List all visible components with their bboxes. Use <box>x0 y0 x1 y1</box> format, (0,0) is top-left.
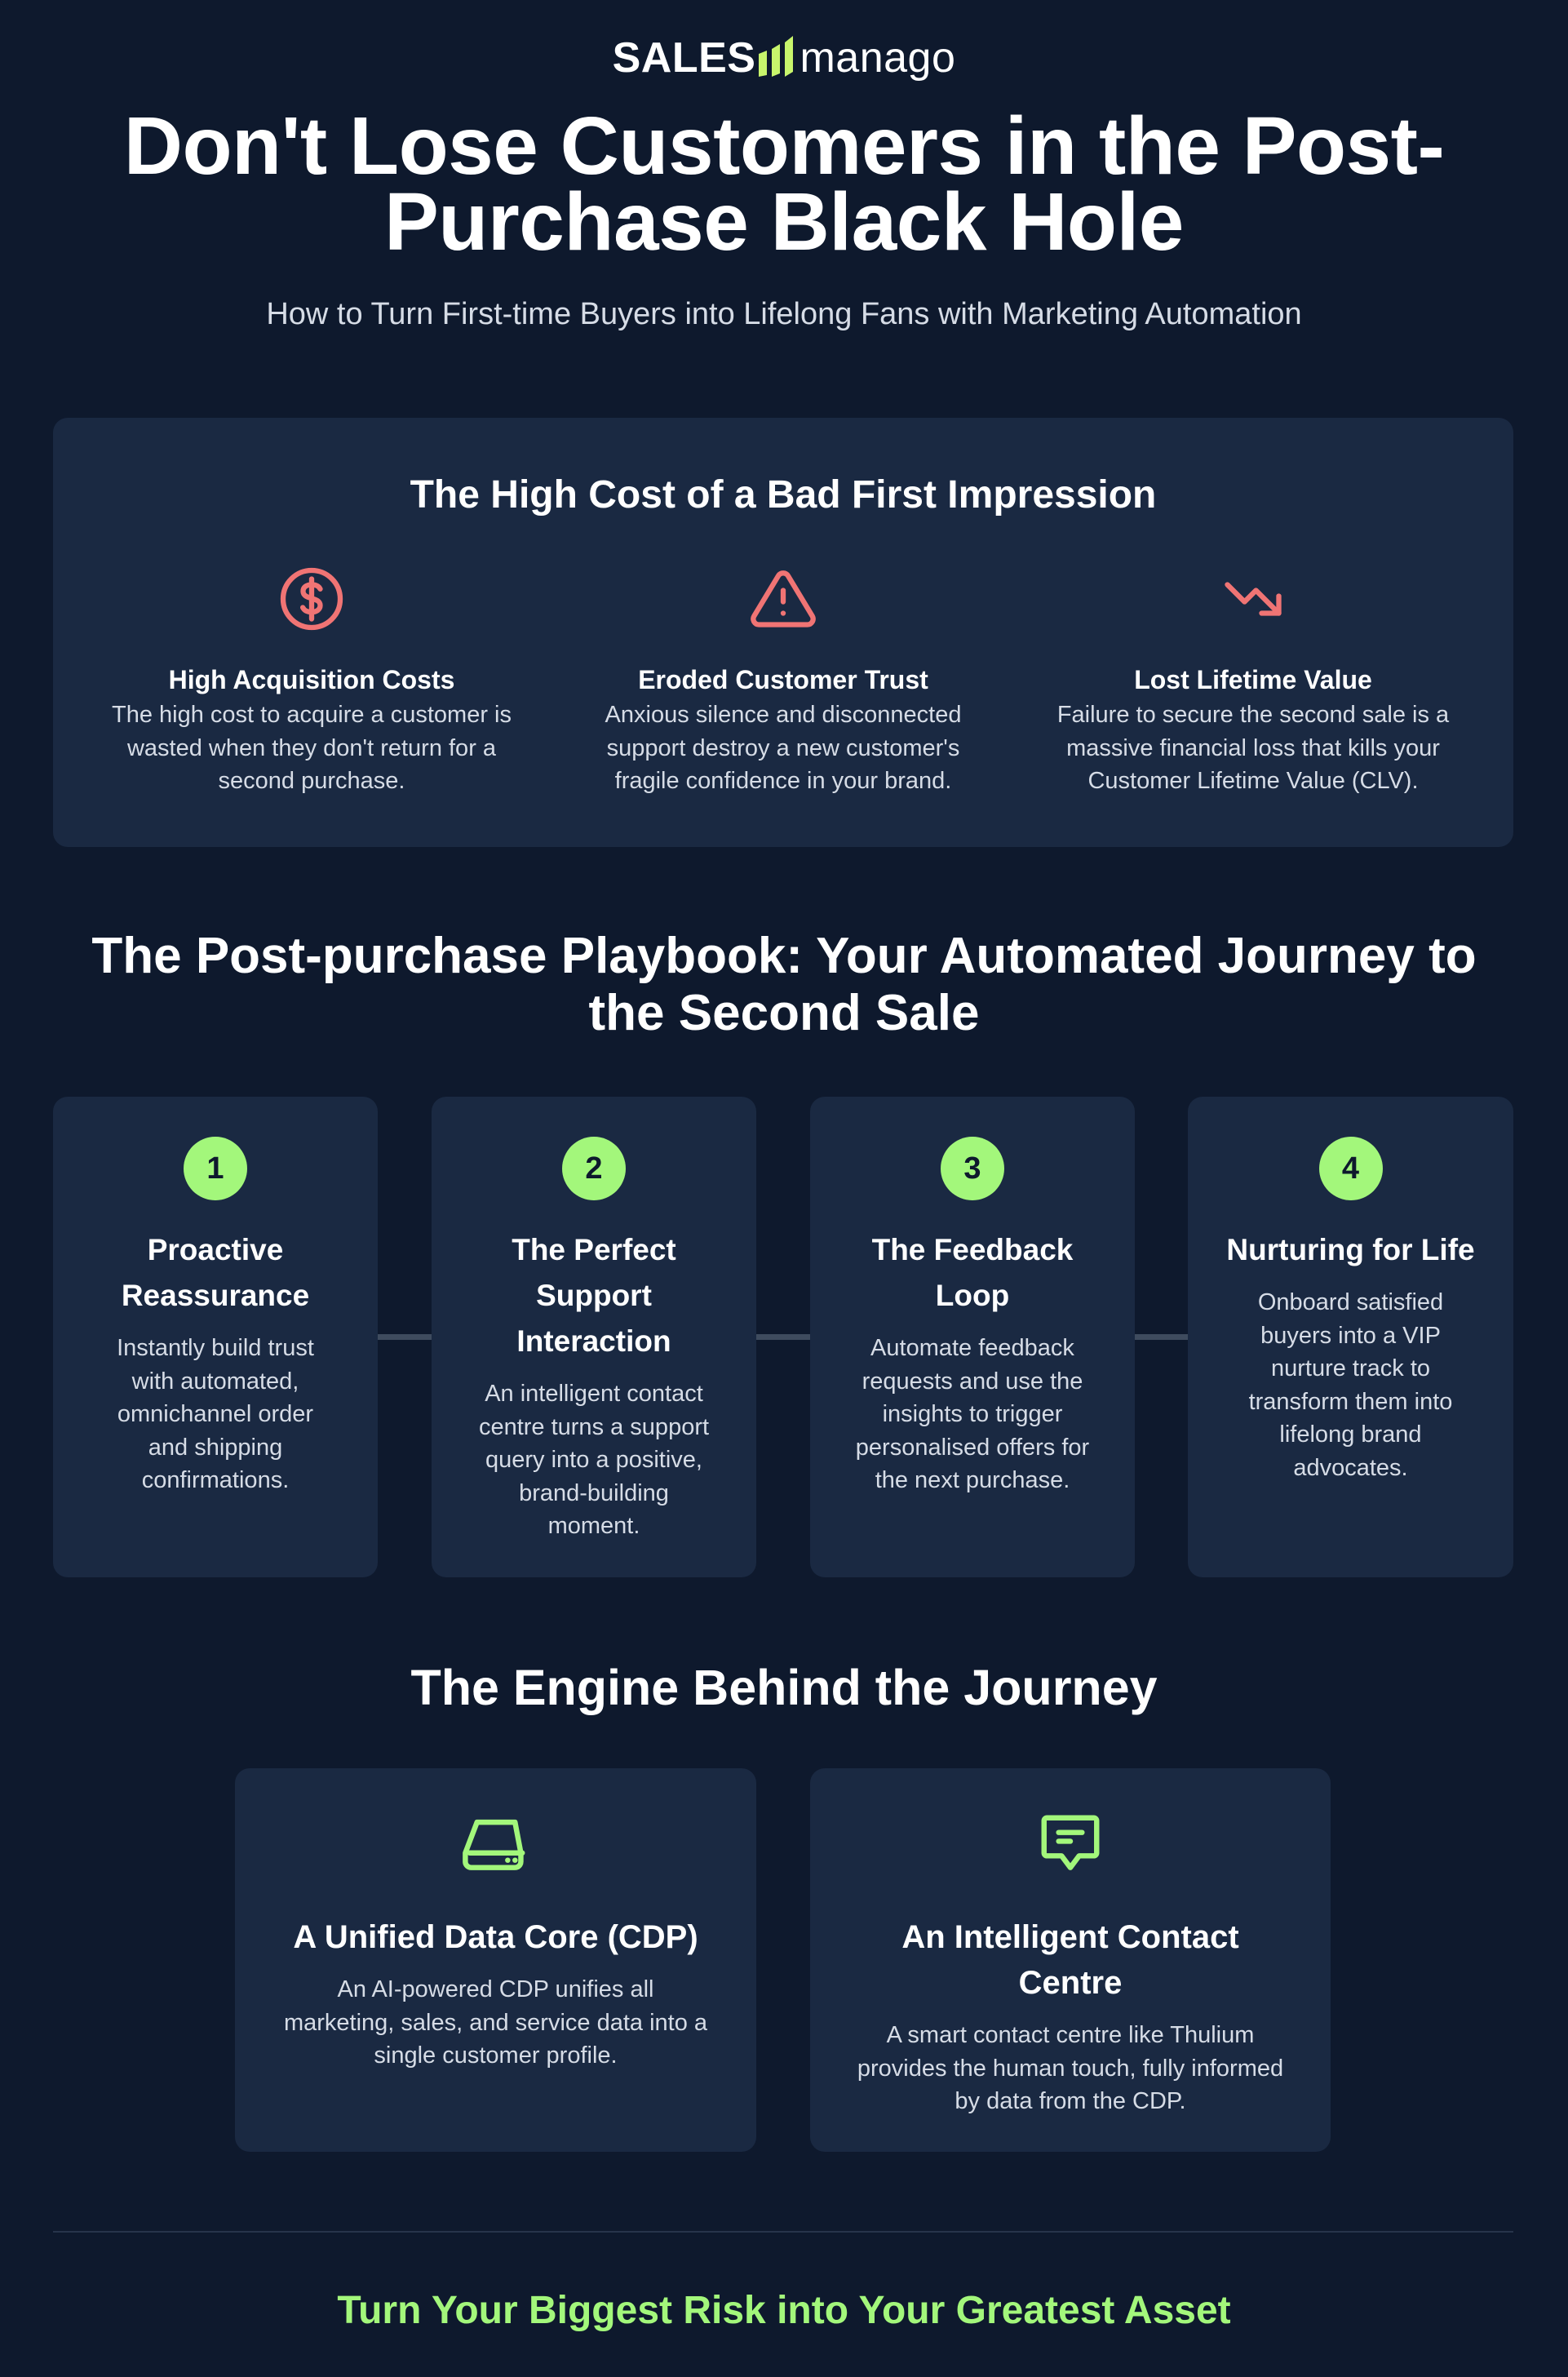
badge 4: 4 <box>1342 1151 1359 1186</box>
step 3: insights to trigger <box>883 1401 1062 1427</box>
item: lifetime value: massive financial loss that kills your <box>1066 734 1440 761</box>
panel: high cost <box>53 418 1513 847</box>
icon: drive <box>463 1820 525 1870</box>
title: Don't Lose Customers in the Post- <box>124 100 1444 192</box>
engine card: contact centre: An Intelligent Contact <box>901 1919 1239 1955</box>
section heading: engine: The Engine Behind the Journey <box>410 1660 1158 1715</box>
icon: trend down <box>1225 582 1282 616</box>
step 1: with automated, <box>132 1368 299 1394</box>
engine card: CDP: single customer profile. <box>374 2042 618 2069</box>
step 2: centre turns a support <box>479 1413 709 1439</box>
step 1: confirmations. <box>142 1467 289 1493</box>
badge 1 <box>184 1137 247 1200</box>
item: acquisition: The high cost to acquire a customer is <box>112 702 512 728</box>
step 2: Support <box>536 1279 652 1312</box>
item: trust: Anxious silence and disconnected <box>605 702 961 728</box>
step 4: nurture track to <box>1271 1355 1430 1381</box>
step 2: query into a positive, <box>485 1447 702 1473</box>
step 1: Reassurance <box>122 1279 309 1312</box>
item: acquisition <box>112 568 512 794</box>
engine card: contact centre: provides the human touch, fully informed <box>857 2055 1283 2081</box>
step 4: Nurturing for Life <box>1226 1233 1475 1266</box>
step 2: The Perfect <box>512 1233 676 1266</box>
engine card: CDP: marketing, sales, and service data into a <box>284 2009 707 2035</box>
item: lifetime value: Customer Lifetime Value (CLV). <box>1087 768 1419 794</box>
engine card: CDP <box>235 1768 756 2152</box>
step 4: buyers into a VIP <box>1260 1322 1441 1348</box>
panel heading: The High Cost of a Bad First Impression <box>410 473 1156 517</box>
step 3: Loop <box>936 1279 1009 1312</box>
title: Purchase Black Hole <box>384 176 1184 268</box>
item: acquisition: High Acquisition Costs <box>169 665 454 694</box>
icon: chat <box>1041 1815 1100 1870</box>
step 4: advocates. <box>1293 1454 1408 1480</box>
item: acquisition: wasted when they don't return for a <box>127 734 496 761</box>
badge 4 <box>1318 1137 1382 1200</box>
step 2: An intelligent contact <box>485 1381 703 1407</box>
badge 3: 3 <box>963 1151 981 1186</box>
step 1: Instantly build trust <box>117 1335 314 1361</box>
item: trust: Eroded Customer Trust <box>638 665 928 694</box>
section heading: playbook <box>91 928 1477 1041</box>
engine card: contact centre <box>810 1768 1331 2152</box>
step 3 <box>810 1097 1135 1577</box>
connectors <box>378 1334 1188 1340</box>
badge 3 <box>941 1137 1004 1200</box>
step 3: personalised offers for <box>856 1435 1089 1461</box>
engine card: contact centre: by data from the CDP. <box>955 2088 1186 2114</box>
engine card: contact centre: A smart contact centre like Thulium <box>887 2022 1254 2048</box>
step 1 <box>53 1097 378 1577</box>
item: lifetime value: Failure to secure the second sale is a <box>1057 702 1449 728</box>
section heading: playbook: the Second Sale <box>589 985 979 1041</box>
step 4 <box>1188 1097 1513 1577</box>
step 2: moment. <box>548 1513 640 1539</box>
title <box>124 100 1444 268</box>
badge 2: 2 <box>585 1151 603 1186</box>
item: trust <box>605 570 961 794</box>
item: trust: fragile confidence in your brand. <box>615 768 951 794</box>
logo: SALES manago <box>613 34 955 82</box>
engine card: contact centre: Centre <box>1019 1965 1122 2001</box>
badge 2 <box>562 1137 626 1200</box>
step 2 <box>432 1097 756 1577</box>
engine card: CDP: An AI-powered CDP unifies all <box>338 1976 653 2002</box>
section heading: playbook: The Post-purchase Playbook: Your Automated Journey to <box>91 928 1477 984</box>
step 3: the next purchase. <box>875 1467 1070 1493</box>
item: trust: support destroy a new customer's <box>607 734 959 761</box>
badge 1: 1 <box>206 1151 224 1186</box>
engine card: CDP: A Unified Data Core (CDP) <box>293 1919 698 1955</box>
step 2: Interaction <box>516 1324 671 1358</box>
item: acquisition: second purchase. <box>219 768 405 794</box>
item: lifetime value <box>1057 582 1449 794</box>
step 1: Proactive <box>148 1233 283 1266</box>
step 3: Automate feedback <box>870 1335 1074 1361</box>
footer tagline: Turn Your Biggest Risk into Your Greatest Asset <box>337 2289 1231 2332</box>
item: lifetime value: Lost Lifetime Value <box>1134 665 1372 694</box>
step 4: transform them into <box>1249 1389 1452 1415</box>
icon: dollar <box>281 568 343 630</box>
step 3: The Feedback <box>872 1233 1073 1266</box>
step 4: lifelong brand <box>1279 1421 1422 1448</box>
divider <box>53 2231 1513 2233</box>
step 3: requests and use the <box>862 1368 1083 1394</box>
subtitle: How to Turn First-time Buyers into Lifelong Fans with Marketing Automation <box>266 297 1302 331</box>
step 1: and shipping <box>148 1435 282 1461</box>
icon: warning <box>751 570 816 628</box>
step 2: brand-building <box>519 1480 669 1506</box>
step 4: Onboard satisfied <box>1258 1289 1443 1315</box>
step 1: omnichannel order <box>117 1401 313 1427</box>
